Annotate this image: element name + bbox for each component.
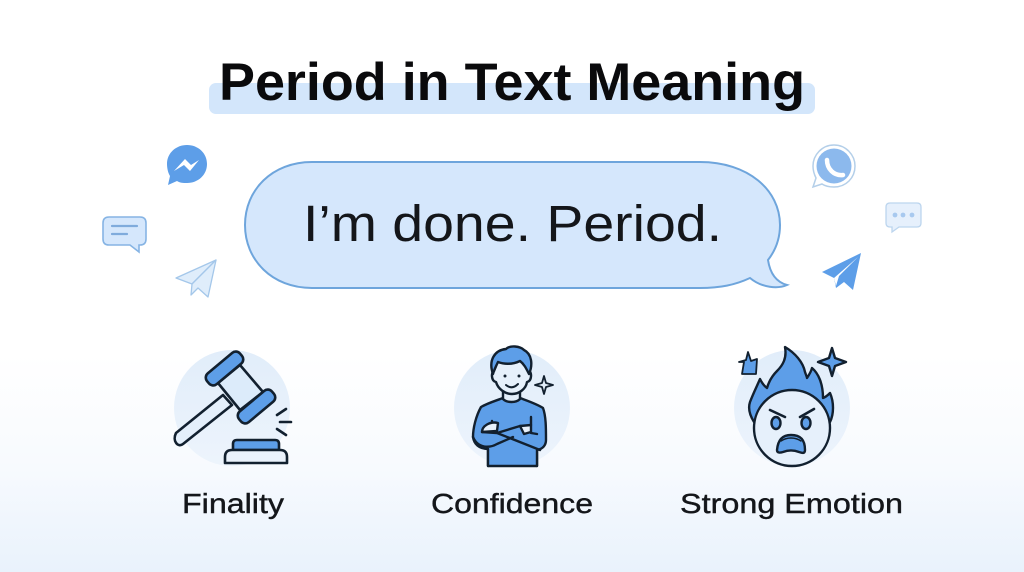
speech bubble (245, 162, 787, 288)
icon: whatsapp (813, 145, 855, 187)
icon: messenger (167, 145, 207, 185)
icon: gavel (174, 349, 291, 466)
title: Period in Text Meaning (219, 53, 805, 112)
icon: light paper plane (176, 260, 216, 297)
label: Finality: Finality (182, 488, 284, 519)
icon: chat bubble with dots (886, 203, 921, 232)
icon: chat bubble with lines (103, 217, 146, 252)
label: Strong Emotion: Strong Emotion (680, 488, 903, 519)
icon: angry face with flames (734, 347, 850, 466)
label: Confidence: Confidence (431, 488, 593, 519)
speech bubble: I’m done. Period. (303, 195, 722, 252)
icon: blue paper plane (822, 253, 861, 290)
icon: confident person (454, 346, 570, 466)
